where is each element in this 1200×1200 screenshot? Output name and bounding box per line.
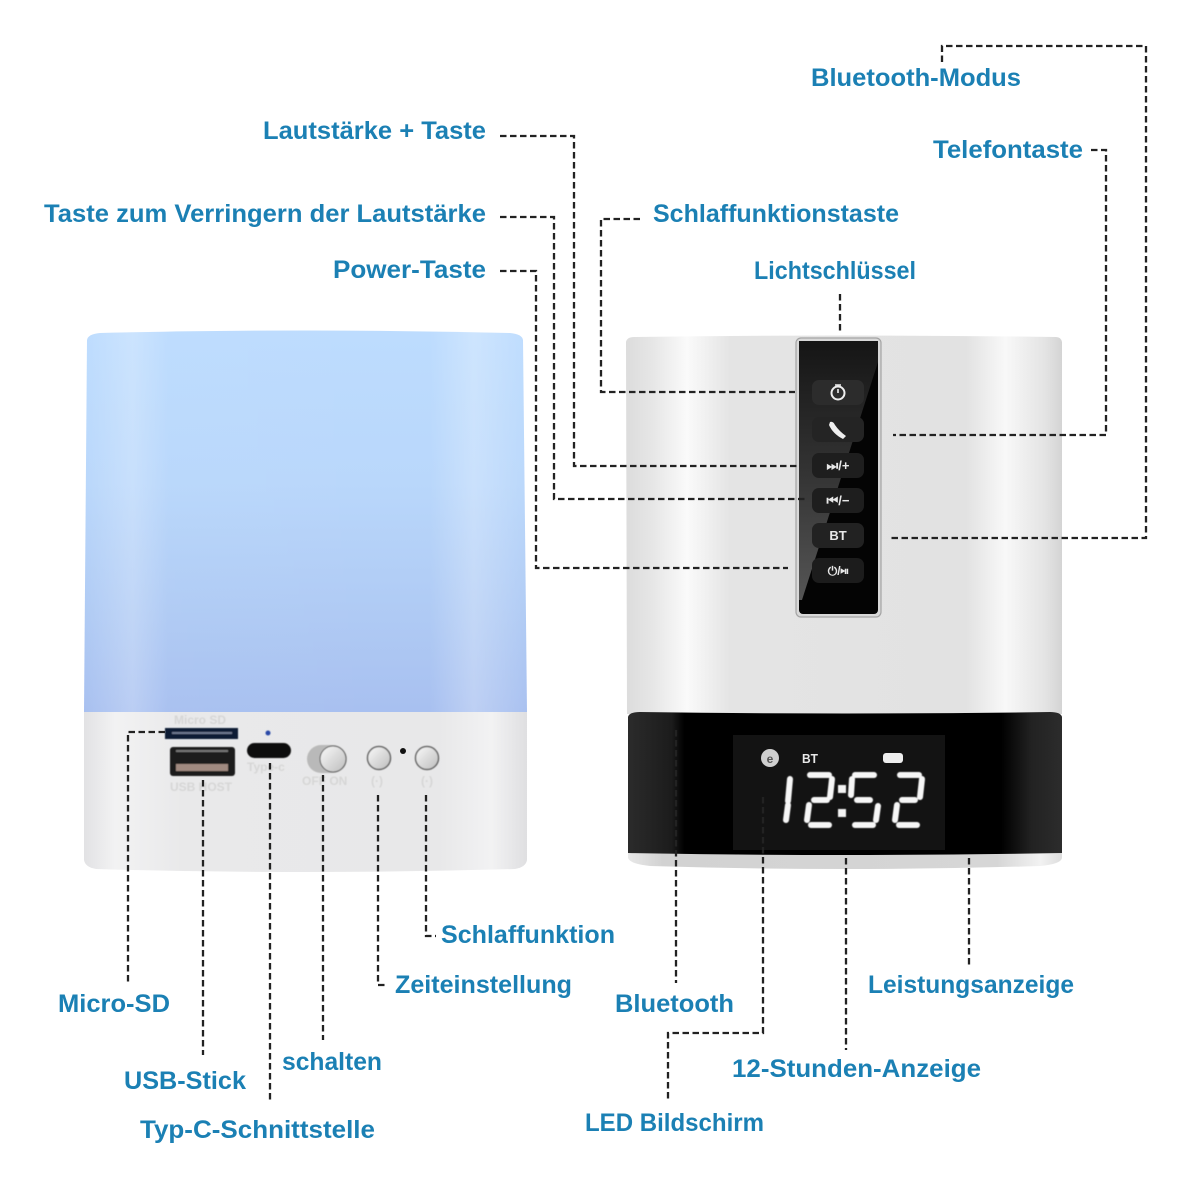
LED display	[733, 735, 945, 850]
label: schalten: schalten	[282, 1048, 382, 1076]
port: micro SD slot: Micro SD	[174, 713, 226, 727]
button: power / play	[812, 558, 864, 583]
indicator dot	[400, 748, 406, 754]
button: time setting: (·)	[371, 774, 383, 788]
button: previous / minus	[812, 488, 864, 513]
label: Micro-SD: Micro-SD	[58, 990, 170, 1018]
label: Bluetooth: Bluetooth	[615, 990, 734, 1018]
button: BT	[812, 523, 864, 548]
port: Type-C	[247, 730, 291, 774]
dashed leader lines	[128, 46, 1146, 1102]
port: micro SD slot	[165, 713, 238, 739]
lower silver rim	[628, 850, 1062, 869]
label: Zeiteinstellung: Zeiteinstellung	[395, 971, 572, 999]
button: power / play: ⏻/⏯	[828, 564, 849, 578]
black display band	[628, 712, 1062, 855]
lamp base	[84, 712, 527, 872]
lamp body	[626, 336, 1062, 714]
button: previous / minus: ⏮/−	[827, 493, 850, 508]
port: USB host	[170, 747, 235, 794]
port: Type-C: Type-c	[247, 760, 285, 774]
button: phone	[812, 417, 864, 442]
button: sleep function	[416, 746, 438, 788]
label: Leistungsanzeige: Leistungsanzeige	[868, 971, 1074, 999]
port: USB host: USB HOST	[170, 780, 233, 794]
label: Typ-C-Schnittstelle: Typ-C-Schnittstelle	[140, 1116, 375, 1144]
label: Bluetooth-Modus: Bluetooth-Modus	[811, 64, 1021, 92]
button: time setting	[368, 746, 390, 788]
control panel	[796, 338, 881, 617]
status label: BT: BT	[802, 751, 818, 766]
label: Power-Taste: Power-Taste	[333, 256, 486, 284]
label: Telefontaste: Telefontaste	[933, 136, 1083, 164]
label: Schlaffunktion: Schlaffunktion	[441, 921, 615, 949]
label: USB-Stick: USB-Stick	[124, 1067, 246, 1095]
lamp: back view with controls and display	[626, 336, 1062, 869]
label: Schlaffunktionstaste: Schlaffunktionstaste	[653, 200, 899, 228]
lamp: front view with ports	[84, 330, 527, 872]
button: BT: BT	[829, 528, 847, 543]
status icon: battery	[883, 753, 903, 763]
label: 12-Stunden-Anzeige: 12-Stunden-Anzeige	[732, 1055, 981, 1083]
lamp shade: blue glow	[84, 330, 527, 712]
switch: off / on	[302, 745, 347, 788]
button: sleep timer	[812, 380, 864, 405]
button: sleep function: (·)	[421, 774, 433, 788]
button: next / plus	[812, 453, 864, 478]
label: Lichtschlüssel: Lichtschlüssel	[754, 257, 916, 285]
label: Taste zum Verringern der Lautstärke: Taste zum Verringern der Lautstärke	[44, 200, 486, 228]
switch: off / on: OFF ON	[302, 774, 347, 788]
LED display: e	[767, 752, 774, 766]
label: Lautstärke + Taste: Lautstärke + Taste	[263, 117, 486, 145]
clock digits 12:52	[786, 775, 922, 825]
status icon: phone	[761, 749, 779, 767]
label: LED Bildschirm: LED Bildschirm	[585, 1109, 764, 1137]
button: next / plus: ⏭/+	[827, 458, 850, 473]
